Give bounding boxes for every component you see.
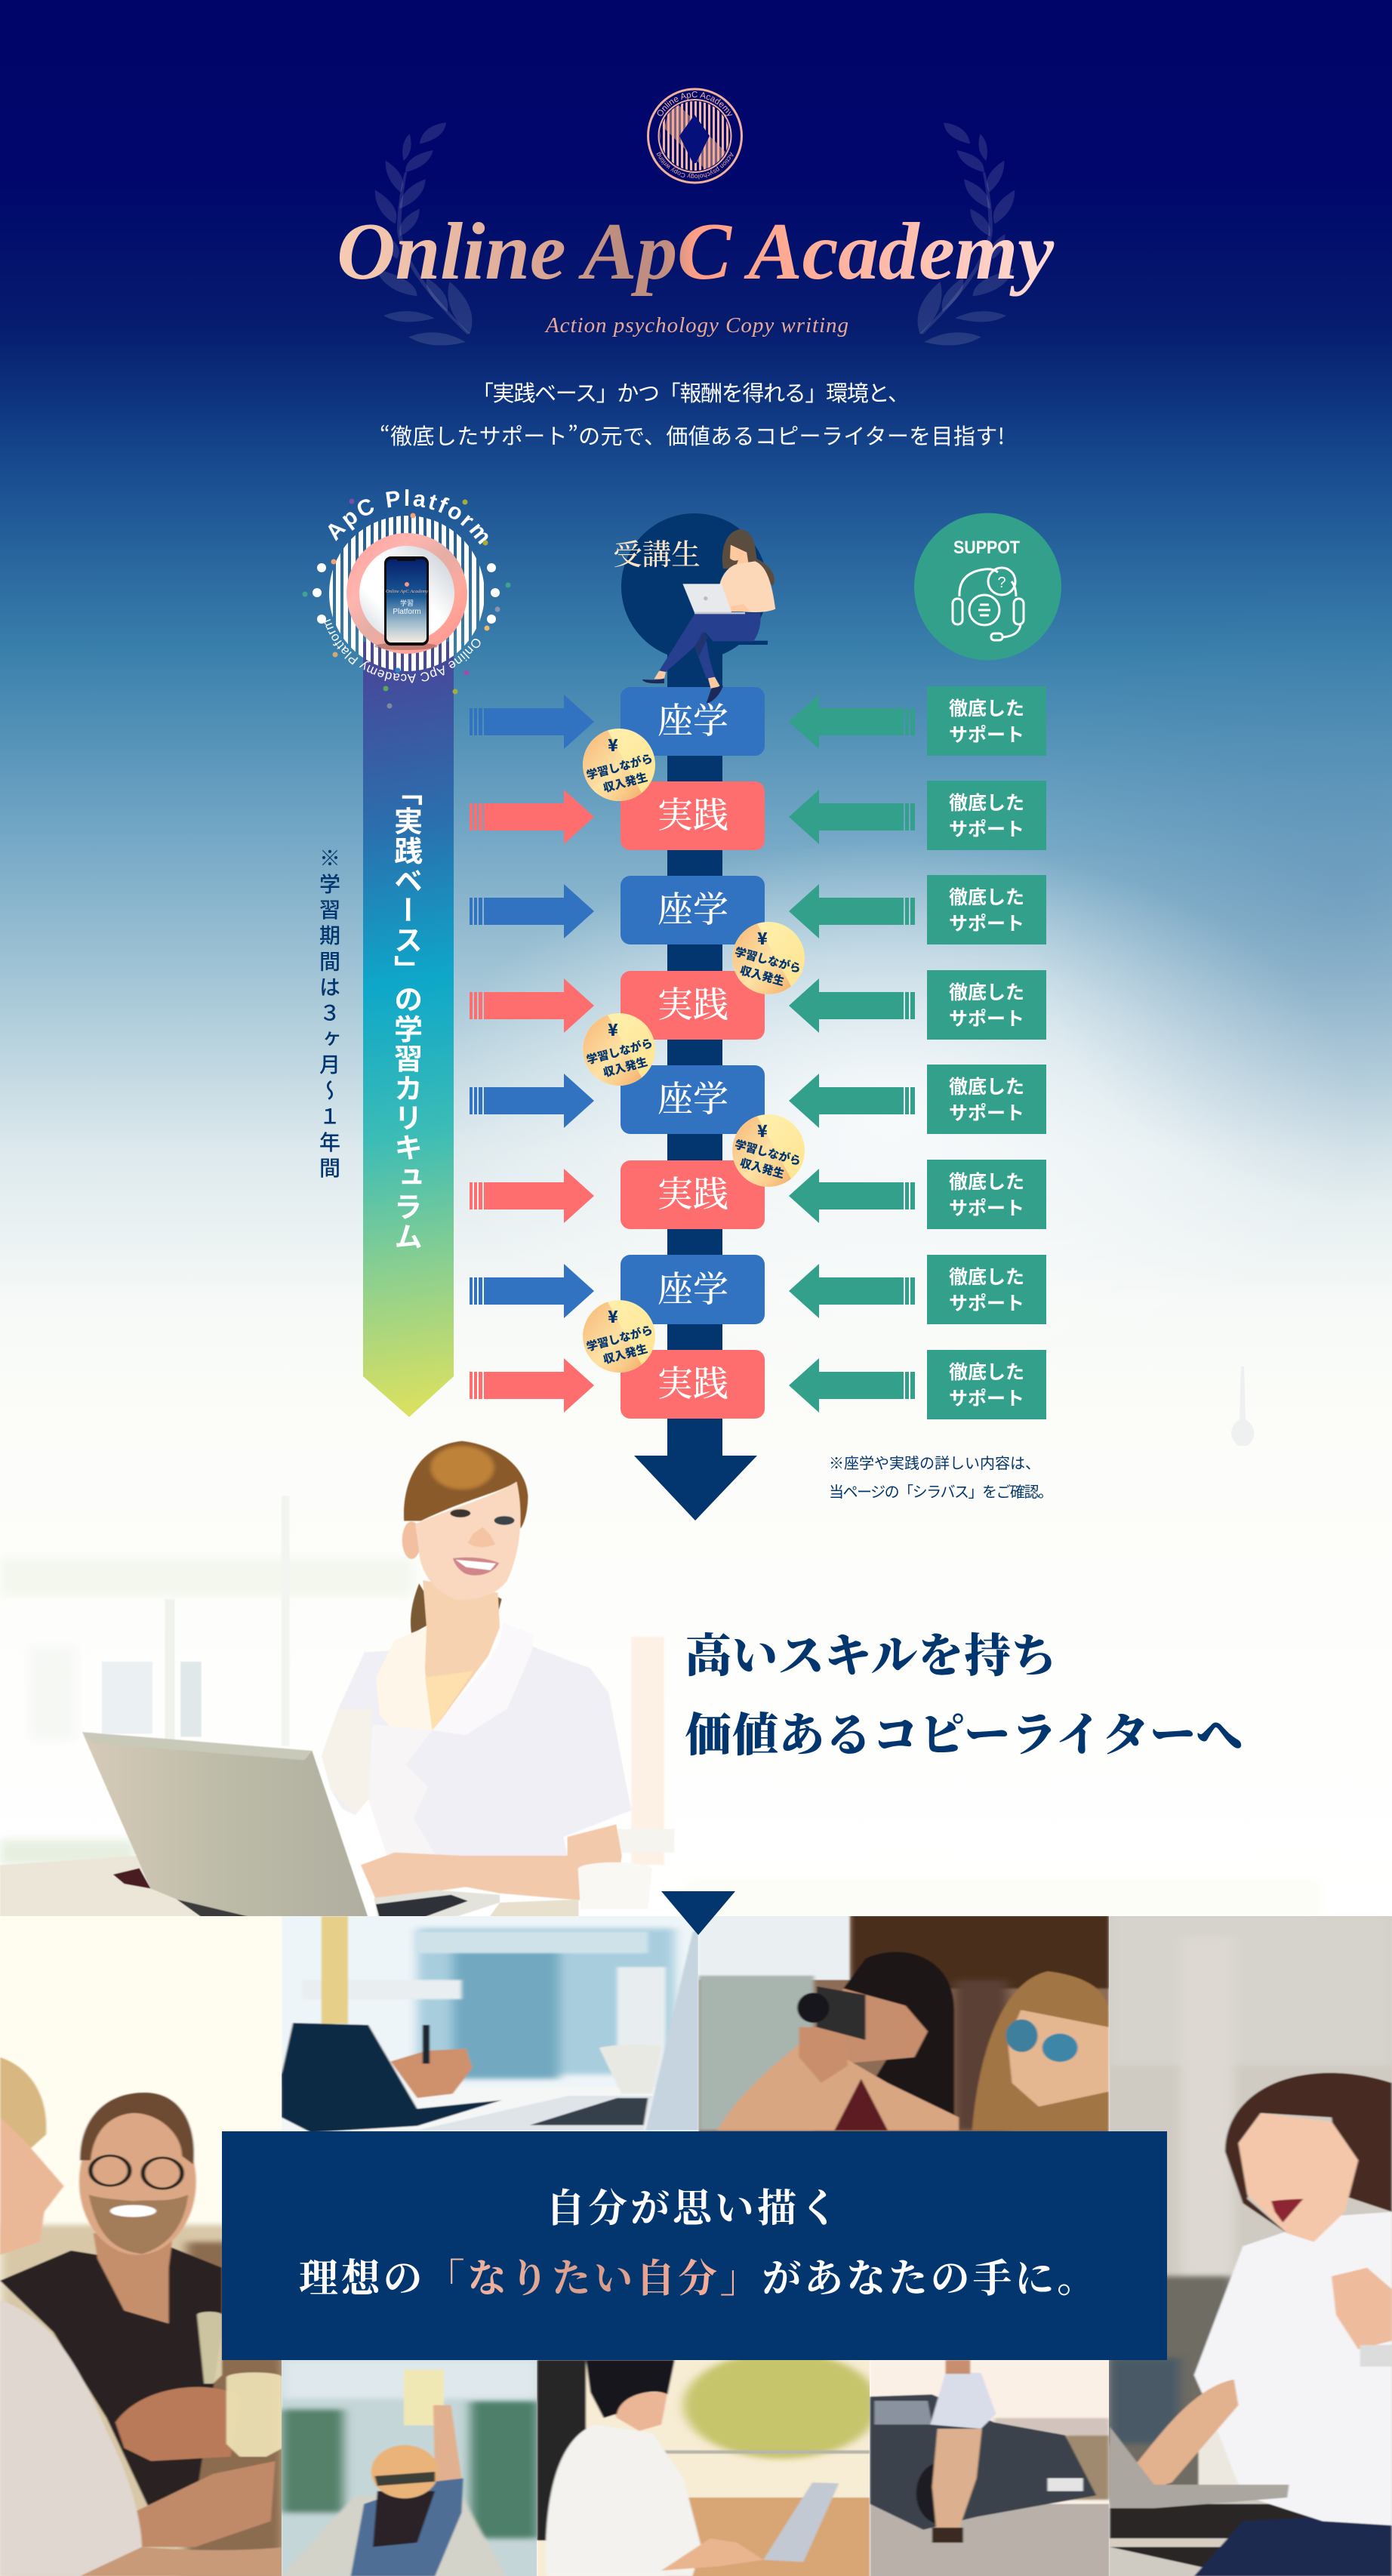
curriculum row 1 xyxy=(470,686,1046,756)
banner line 2: 理想の「なりたい自分」があなたの手に。 xyxy=(299,2247,1096,2303)
phone: Platform xyxy=(393,608,421,616)
logo top xyxy=(647,88,743,184)
curriculum row 7: サポート xyxy=(949,1289,1024,1316)
intro text: 「実践ベース」かつ「報酬を得れる」環境と、 xyxy=(472,376,910,408)
badge: earning while learning 4: 学習しながら xyxy=(733,1136,803,1169)
center flow arrow xyxy=(634,649,757,1521)
arrow: down triangle xyxy=(661,1891,735,1935)
face xyxy=(415,1482,521,1600)
illustration: student with laptop xyxy=(642,529,775,704)
phone: 学習 xyxy=(400,598,414,608)
curriculum row 5: 徹底した xyxy=(949,1072,1024,1099)
note: study period: ※学習期間は３ヶ月〜１年間 xyxy=(315,847,345,1183)
banner line 1: 自分が思い描く xyxy=(546,2177,839,2233)
photo: smiling woman at laptop xyxy=(0,1441,674,1916)
chest xyxy=(423,1580,500,1732)
badge: earning while learning 1: 収入発生 xyxy=(602,769,649,796)
curriculum row 1: サポート xyxy=(949,720,1024,747)
curriculum row 6: 実践 xyxy=(658,1166,728,1217)
badge: earning while learning 5: ¥ xyxy=(608,1304,618,1328)
forearm and hand xyxy=(361,1824,622,1900)
note: syllabus xyxy=(829,1451,1053,1502)
dots xyxy=(302,498,510,708)
curriculum row 4: 徹底した xyxy=(949,978,1024,1005)
badge: earning while learning 4: ¥ xyxy=(757,1118,768,1142)
badge: earning while learning 4: 収入発生 xyxy=(738,1154,786,1182)
curriculum label vertical: 「実践ベース」の学習カリキュラム xyxy=(388,777,429,1252)
badge: earning while learning 3: 収入発生 xyxy=(602,1053,649,1080)
window background xyxy=(0,1496,664,1866)
badge: earning while learning 2: 学習しながら xyxy=(733,944,803,976)
photo tile: man with car xyxy=(870,2360,1110,2576)
curriculum row 2: 徹底した xyxy=(949,788,1024,815)
icon: laurel left xyxy=(375,122,472,346)
support circle: ? xyxy=(997,575,1006,591)
ApC platform badge: ApC Platform xyxy=(328,489,488,545)
curriculum row 1: 座学 xyxy=(658,693,728,744)
curriculum row 5: 座学 xyxy=(658,1071,728,1122)
curriculum row 4: 実践 xyxy=(658,977,728,1028)
mug xyxy=(578,1863,652,1909)
heading: become a skilled copywriter: 高いスキルを持ち xyxy=(685,1619,1057,1685)
curriculum row 5 xyxy=(470,1065,1046,1134)
note: syllabus: ※座学や実践の詳しい内容は、 xyxy=(829,1451,1040,1473)
laptop lid xyxy=(82,1732,368,1918)
intro text xyxy=(380,376,1005,451)
intro text: “徹底したサポート”の元で、価値あるコピーライターを目指す! xyxy=(380,419,1005,451)
phone xyxy=(374,556,438,650)
photo tile: woman cheering at laptop xyxy=(1109,1915,1392,2576)
ear xyxy=(402,1521,421,1559)
keyboard xyxy=(374,1890,500,1918)
curriculum row 6 xyxy=(470,1160,1046,1229)
badge: earning while learning 3 xyxy=(583,1013,659,1086)
curriculum row 4 xyxy=(470,970,1046,1040)
band: practice-based curriculum xyxy=(363,642,454,1417)
ApC platform badge xyxy=(302,489,510,708)
curriculum row 5: サポート xyxy=(949,1098,1024,1126)
student circle xyxy=(621,513,768,660)
table xyxy=(0,1856,256,1917)
phone: Online ApC Academy xyxy=(386,589,428,594)
badge: earning while learning 5: 収入発生 xyxy=(602,1340,649,1367)
curriculum row 7 xyxy=(470,1255,1046,1324)
ApC platform badge: Online ApC Academy Platform xyxy=(325,619,480,683)
icon: laurel right xyxy=(918,122,1015,346)
heading: become a skilled copywriter xyxy=(685,1619,1243,1764)
badge: earning while learning 3: 学習しながら xyxy=(584,1035,654,1068)
support circle xyxy=(914,513,1061,660)
badge: earning while learning 3: ¥ xyxy=(608,1017,618,1041)
title: Online ApC Academy xyxy=(337,207,1055,297)
badge: earning while learning 1: 学習しながら xyxy=(584,750,654,783)
student label: 受講生 xyxy=(613,532,701,574)
blouse xyxy=(322,1622,631,1856)
salmon ring xyxy=(346,533,467,654)
curriculum row 8: 実践 xyxy=(658,1356,728,1407)
curriculum row 3: サポート xyxy=(949,909,1024,936)
curriculum row 6: サポート xyxy=(949,1194,1024,1221)
logo top: Online ApC Academy xyxy=(657,91,732,116)
photo tile: friends with camera xyxy=(699,1915,1109,2134)
photo tile: young man with laptop xyxy=(537,2352,879,2576)
background gradient xyxy=(0,0,1392,1918)
curriculum row 3: 座学 xyxy=(658,882,728,932)
curriculum row 8 xyxy=(470,1350,1046,1419)
heading: become a skilled copywriter: 価値あるコピーライターへ xyxy=(685,1699,1243,1764)
chair xyxy=(618,1829,674,1853)
badge: earning while learning 2: 収入発生 xyxy=(738,962,786,989)
badge: earning while learning 2 xyxy=(728,922,805,994)
curriculum row 2 xyxy=(470,781,1046,850)
badge: earning while learning 1 xyxy=(583,729,659,801)
badge: earning while learning 4 xyxy=(728,1114,805,1187)
photo tile: notebook and laptop xyxy=(282,1915,699,2134)
icon: headset xyxy=(953,568,1024,640)
curriculum row 3: 徹底した xyxy=(949,883,1024,910)
hair xyxy=(404,1441,528,1529)
support label: SUPPOT xyxy=(953,538,1020,558)
curriculum row 2: サポート xyxy=(949,815,1024,842)
badge: earning while learning 2: ¥ xyxy=(757,926,768,950)
ponytail xyxy=(411,1583,502,1634)
note: syllabus: 当ページの「シラバス」をご確認。 xyxy=(829,1480,1053,1502)
subtitle: Action psychology Copy writing xyxy=(544,313,848,337)
curriculum row 1: 徹底した xyxy=(949,694,1024,721)
curriculum row 8: サポート xyxy=(949,1384,1024,1411)
curriculum row 6: 徹底した xyxy=(949,1167,1024,1194)
badge: earning while learning 5 xyxy=(583,1300,659,1373)
badge: earning while learning 5: 学習しながら xyxy=(584,1322,654,1354)
curriculum row 2: 実践 xyxy=(658,787,728,838)
banner panel xyxy=(222,2131,1167,2360)
curriculum row 7: 徹底した xyxy=(949,1262,1024,1290)
curriculum row 7: 座学 xyxy=(658,1262,728,1312)
curriculum row 3 xyxy=(470,875,1046,944)
curriculum row 8: 徹底した xyxy=(949,1357,1024,1385)
badge: earning while learning 1: ¥ xyxy=(608,732,618,756)
photo tile: traveller with hat xyxy=(282,2360,539,2576)
curriculum row 4: サポート xyxy=(949,1004,1024,1031)
logo top: Action psychology Copy writing xyxy=(657,152,734,180)
photo tile: couple toasting xyxy=(0,1915,284,2576)
